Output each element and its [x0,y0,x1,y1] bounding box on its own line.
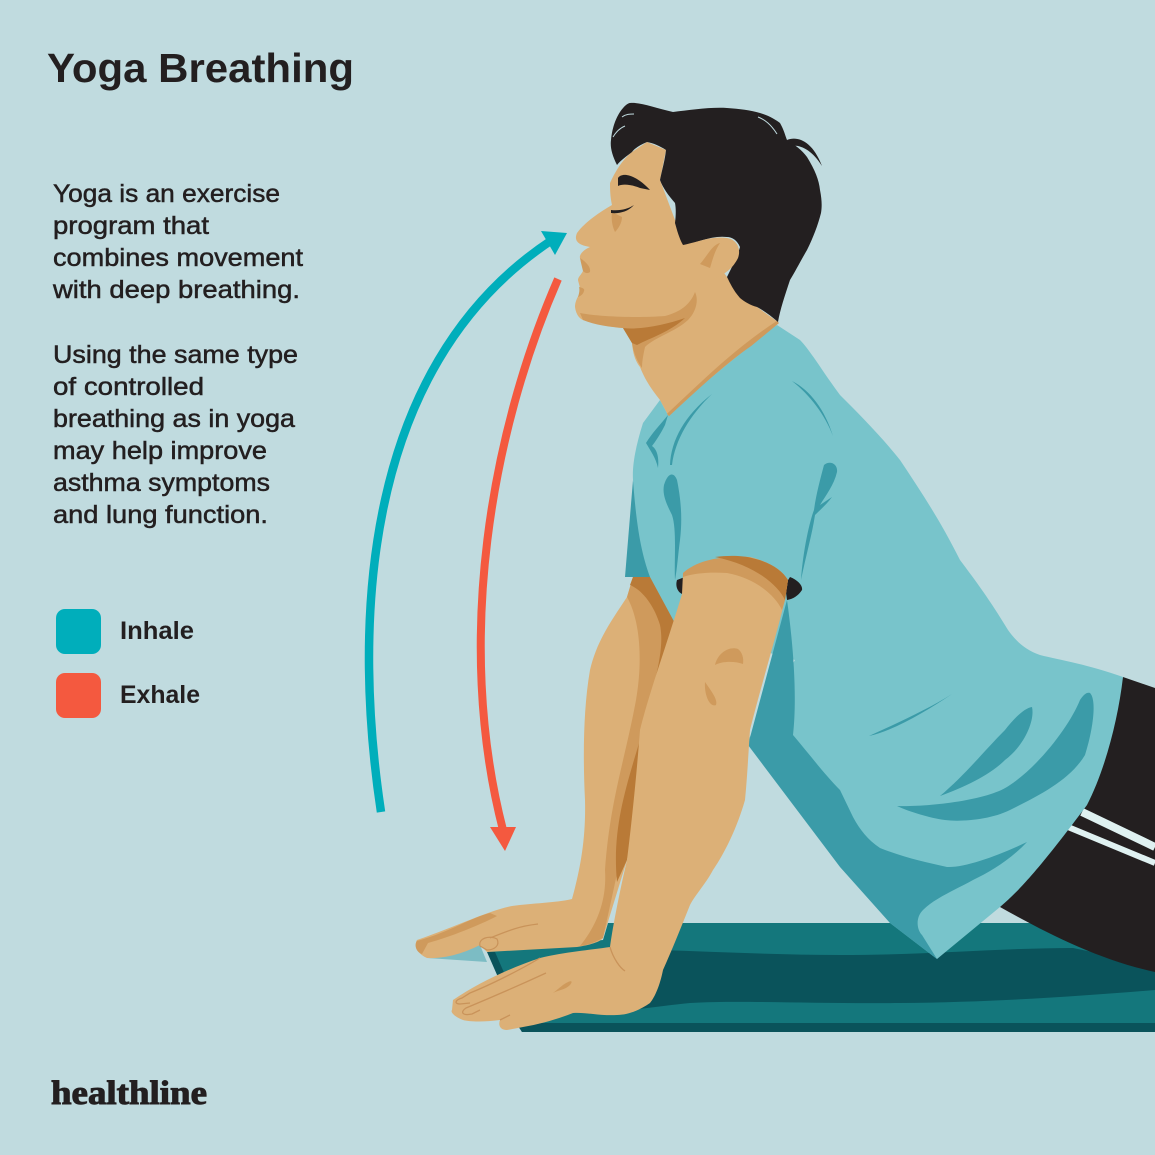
face and neck [575,142,778,415]
legend: inhale label: Inhale [120,617,194,645]
jaw shadow [580,292,697,368]
closed eye [611,205,634,213]
shirt underside shadow [748,600,1027,959]
eyebrow [618,175,650,190]
text block: controlled breathing: asthma symptoms [53,469,270,497]
shirt folds [646,381,1094,821]
text block: yoga intro: Yoga is an exercise [53,180,280,208]
text block: controlled breathing [53,341,298,529]
eye shadow [612,212,622,232]
sleeve opening [676,575,802,600]
lips [578,258,590,297]
ear [688,237,739,280]
neck and head [575,103,822,415]
title: Yoga Breathing [47,45,354,91]
exhale arrow [481,279,558,851]
text block: controlled breathing: and lung function. [53,501,268,529]
stray hair [787,139,822,166]
shirt [633,325,1123,959]
front arm and hand [452,556,802,1030]
hair highlights [613,114,777,137]
legend: inhale swatch [56,609,101,654]
legend: exhale label: Exhale [120,681,200,709]
text block: controlled breathing: breathing as in yoga [53,405,295,433]
back sleeve shadow [625,480,652,577]
text block: controlled breathing: may help improve [53,437,267,465]
inhale arrow [369,231,567,812]
text block: yoga intro: combines movement [53,244,303,272]
hair [611,103,822,322]
text block: controlled breathing: Using the same type [53,341,298,369]
front arm [452,557,788,1030]
logo: healthline [51,1075,207,1112]
sleeve shadow band [683,557,788,610]
yoga mat [427,923,1155,1032]
shirt body [633,325,1123,959]
text block: yoga intro: program that [53,212,209,240]
legend: exhale swatch [56,673,101,718]
text block: yoga intro: with deep breathing. [52,276,300,304]
text block: controlled breathing: of controlled [53,373,204,401]
collar shadow [668,322,778,415]
text block: yoga intro [52,180,303,304]
elbow marks [553,648,743,993]
pants stripes [1068,812,1155,863]
pants [1000,677,1155,972]
legend [56,609,200,718]
finger lines [456,947,625,1020]
back arm and hand [416,577,677,958]
